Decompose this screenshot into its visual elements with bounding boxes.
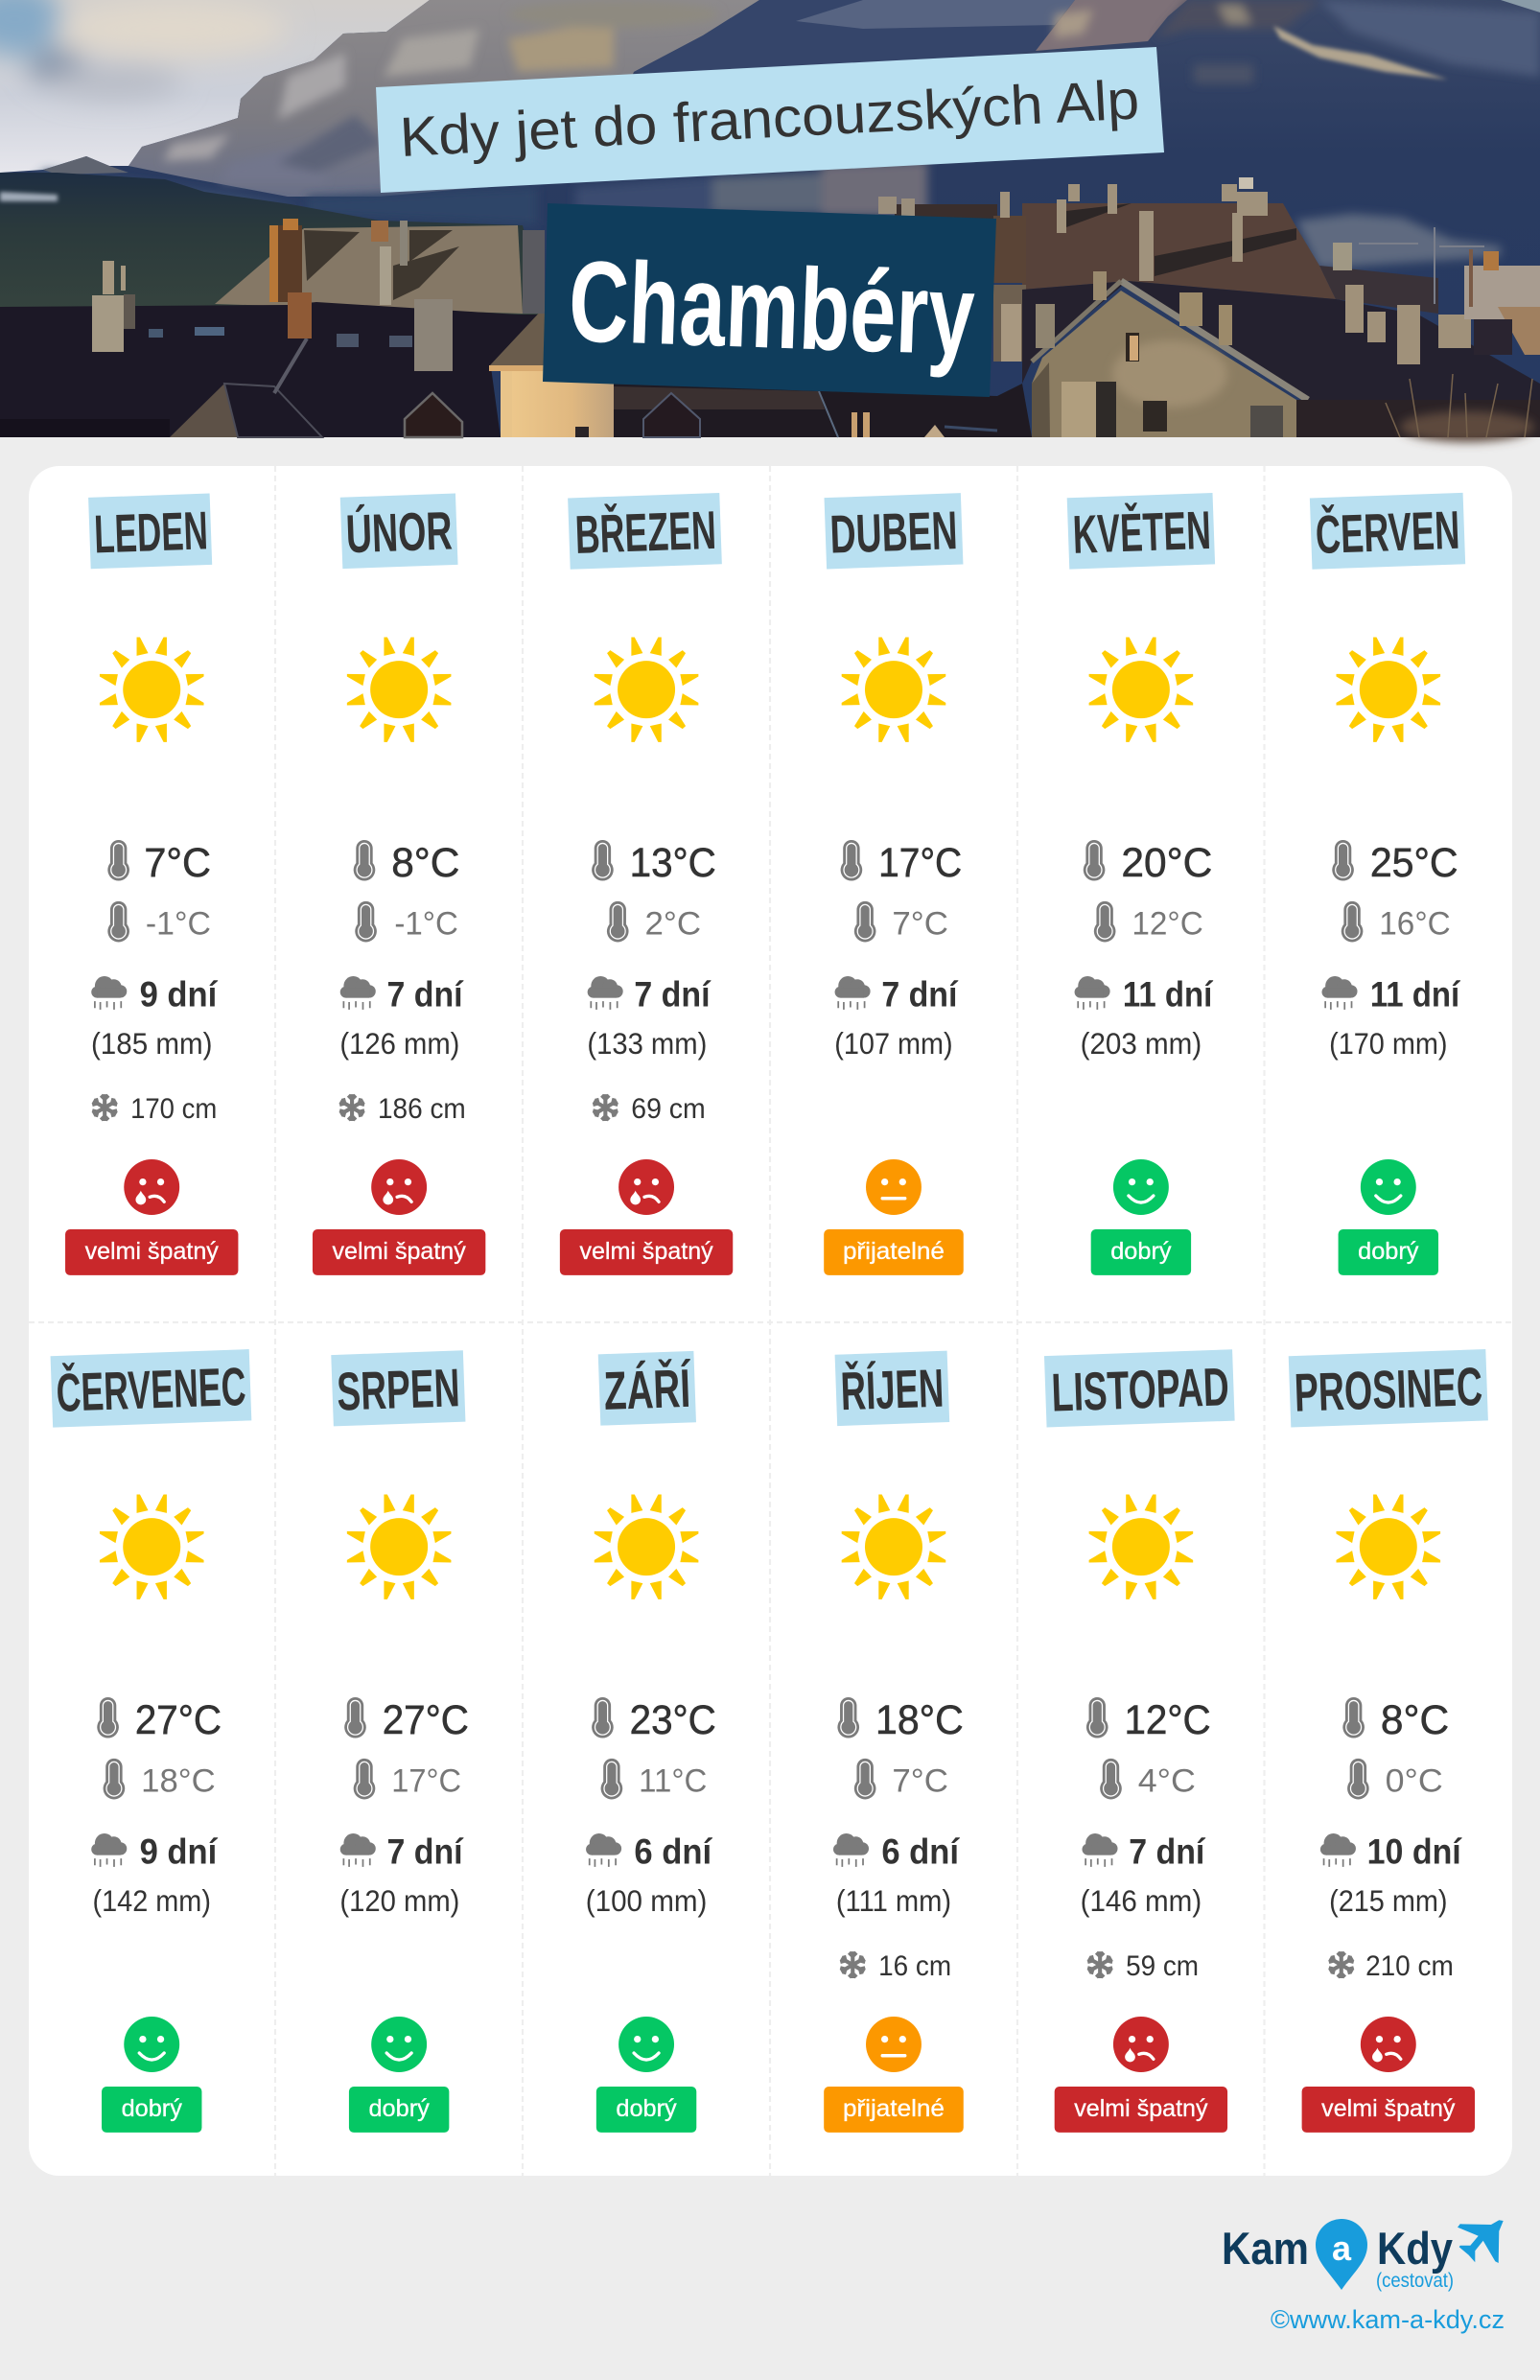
high temperature: 8°C bbox=[1381, 1697, 1449, 1743]
panel: ZÁŘÍ bbox=[586, 1351, 716, 2133]
icon: sun bbox=[595, 1494, 698, 1599]
rainy days bbox=[91, 1831, 219, 1871]
rating badge: velmi špatný bbox=[1074, 2095, 1208, 2122]
rating badge: přijatelné bbox=[843, 1238, 945, 1265]
rating badge bbox=[349, 2087, 449, 2133]
rating icon bbox=[1361, 2017, 1416, 2072]
precipitation: (107 mm) bbox=[834, 1026, 953, 1061]
panel: ÚNOR bbox=[313, 494, 485, 1275]
snow depth: 186 cm bbox=[378, 1094, 466, 1125]
month heading bbox=[825, 493, 963, 569]
rating icon bbox=[1361, 1159, 1416, 1215]
panel: KVĚTEN bbox=[1067, 493, 1215, 1275]
low temperature: 0°C bbox=[1386, 1763, 1443, 1800]
panel: SRPEN bbox=[331, 1350, 469, 2133]
rating icon bbox=[1113, 1159, 1169, 1215]
rainy days: 6 dní bbox=[634, 1831, 713, 1871]
low temperature bbox=[104, 1759, 216, 1800]
rating badge: dobrý bbox=[1110, 1238, 1172, 1265]
rating icon bbox=[124, 2017, 179, 2072]
high temperature: 23°C bbox=[630, 1697, 716, 1743]
panel: BŘEZEN bbox=[560, 493, 733, 1275]
rating icon bbox=[618, 1159, 674, 1215]
rating icon bbox=[866, 1159, 922, 1215]
panel: ČERVENEC bbox=[51, 1349, 251, 2133]
rainy days: 11 dní bbox=[1123, 973, 1214, 1014]
rainy days: 7 dní bbox=[1129, 1831, 1206, 1871]
precipitation: (146 mm) bbox=[1081, 1883, 1202, 1918]
high temperature bbox=[592, 840, 716, 886]
rainy days bbox=[1082, 1831, 1206, 1871]
logo word: Kam: Kam bbox=[1222, 2223, 1309, 2274]
rating icon bbox=[371, 1159, 427, 1215]
panel: PROSINEC bbox=[1289, 1349, 1488, 2133]
icon: sun bbox=[842, 637, 945, 742]
rating icon bbox=[371, 2017, 427, 2072]
month heading: BŘEZEN bbox=[574, 500, 717, 565]
snow depth: 16 cm bbox=[878, 1951, 951, 1982]
icon: sun bbox=[1337, 637, 1440, 742]
rating badge bbox=[596, 2087, 696, 2133]
snow depth bbox=[338, 1094, 466, 1125]
city banner: Chambéry bbox=[543, 203, 996, 397]
low temperature bbox=[107, 901, 211, 943]
month heading bbox=[340, 494, 458, 569]
icon: sun bbox=[100, 637, 204, 742]
rating icon bbox=[618, 2017, 674, 2072]
snow depth: 69 cm bbox=[631, 1094, 706, 1125]
month heading bbox=[568, 493, 722, 570]
precipitation: (120 mm) bbox=[339, 1883, 459, 1918]
month heading bbox=[598, 1351, 696, 1426]
panel: months card bbox=[29, 466, 1512, 2176]
high temperature bbox=[592, 1697, 716, 1743]
rating badge bbox=[102, 2087, 201, 2133]
precipitation: (111 mm) bbox=[836, 1883, 951, 1918]
icon: map pin with a bbox=[1316, 2219, 1367, 2290]
rating badge bbox=[824, 1229, 964, 1275]
high temperature: 17°C bbox=[878, 840, 962, 886]
panel: DUBEN bbox=[824, 493, 964, 1275]
month heading bbox=[331, 1350, 465, 1426]
high temperature bbox=[1342, 1697, 1449, 1743]
month heading bbox=[51, 1349, 251, 1428]
high temperature: 7°C bbox=[144, 840, 211, 886]
snow depth bbox=[1328, 1951, 1454, 1982]
icon: sun bbox=[100, 1494, 204, 1599]
low temperature: 16°C bbox=[1379, 906, 1451, 943]
precipitation: (170 mm) bbox=[1329, 1026, 1448, 1061]
icon: sun bbox=[347, 1494, 451, 1599]
rating badge: dobrý bbox=[122, 2095, 182, 2122]
month heading bbox=[835, 1351, 949, 1426]
low temperature: 7°C bbox=[892, 906, 948, 943]
rainy days: 10 dní bbox=[1367, 1831, 1462, 1871]
month heading bbox=[88, 493, 212, 569]
low temperature: 7°C bbox=[892, 1763, 948, 1800]
rainy days: 7 dní bbox=[386, 1831, 464, 1871]
rainy days bbox=[1320, 1831, 1462, 1871]
rating badge: dobrý bbox=[616, 2095, 677, 2122]
rainy days bbox=[340, 973, 464, 1014]
low temperature bbox=[854, 1759, 948, 1800]
snow depth bbox=[839, 1951, 951, 1982]
rainy days bbox=[1321, 973, 1461, 1014]
precipitation: (100 mm) bbox=[586, 1883, 707, 1918]
snow depth bbox=[91, 1094, 217, 1125]
low temperature: 2°C bbox=[644, 906, 701, 943]
icon: sun bbox=[842, 1494, 945, 1599]
high temperature bbox=[1086, 1697, 1211, 1743]
panel: ŘÍJEN bbox=[824, 1351, 964, 2133]
snow depth: 170 cm bbox=[130, 1094, 217, 1125]
icon: sun bbox=[1089, 1494, 1193, 1599]
rainy days bbox=[1075, 973, 1214, 1014]
precipitation: (133 mm) bbox=[587, 1026, 707, 1061]
high temperature: 27°C bbox=[135, 1697, 222, 1743]
header photo: Alps above Chambéry roofs bbox=[0, 0, 1540, 442]
low temperature: 17°C bbox=[391, 1763, 461, 1800]
low temperature: -1°C bbox=[394, 906, 458, 943]
icon: sun bbox=[347, 637, 451, 742]
precipitation: (142 mm) bbox=[93, 1883, 211, 1918]
logo subtitle: (cestovat) bbox=[1376, 2270, 1454, 2292]
logo: Kam a Kdy bbox=[1222, 2219, 1504, 2292]
high temperature: 13°C bbox=[630, 840, 716, 886]
high temperature bbox=[97, 1697, 222, 1743]
low temperature bbox=[854, 901, 948, 943]
rainy days bbox=[588, 973, 712, 1014]
rainy days: 7 dní bbox=[634, 973, 712, 1014]
low temperature bbox=[601, 1759, 707, 1800]
icon: airplane bbox=[1458, 2220, 1504, 2263]
snow depth bbox=[1086, 1951, 1199, 1982]
rainy days bbox=[833, 1831, 961, 1871]
month heading: SRPEN bbox=[336, 1357, 461, 1422]
rating badge: přijatelné bbox=[843, 2095, 945, 2122]
high temperature bbox=[354, 840, 459, 886]
icon: map pin with a: a bbox=[1332, 2228, 1352, 2268]
rating icon bbox=[1113, 2017, 1169, 2072]
month heading: LISTOPAD bbox=[1051, 1356, 1230, 1423]
rating badge: dobrý bbox=[368, 2095, 430, 2122]
rainy days: 6 dní bbox=[881, 1831, 961, 1871]
low temperature bbox=[1094, 901, 1203, 943]
high temperature bbox=[841, 840, 962, 886]
icon: sun bbox=[1337, 1494, 1440, 1599]
low temperature: 4°C bbox=[1138, 1763, 1196, 1800]
city banner: Chambéry: Chambéry bbox=[567, 237, 977, 380]
high temperature bbox=[1332, 840, 1458, 886]
precipitation: (126 mm) bbox=[339, 1026, 459, 1061]
logo word: Kdy: Kdy bbox=[1377, 2223, 1453, 2274]
high temperature: 12°C bbox=[1124, 1697, 1211, 1743]
snow depth: 210 cm bbox=[1365, 1951, 1454, 1982]
low temperature bbox=[607, 901, 701, 943]
low temperature: 11°C bbox=[639, 1763, 707, 1800]
rating badge: velmi špatný bbox=[333, 1238, 466, 1265]
low temperature bbox=[354, 1759, 461, 1800]
month heading: ŘÍJEN bbox=[840, 1358, 945, 1421]
rainy days bbox=[586, 1831, 713, 1871]
low temperature bbox=[1342, 901, 1451, 943]
website credit: ©www.kam-a-kdy.cz bbox=[1271, 2305, 1505, 2334]
high temperature: 20°C bbox=[1121, 840, 1212, 886]
rating badge: velmi špatný bbox=[579, 1238, 713, 1265]
high temperature bbox=[344, 1697, 469, 1743]
rating badge bbox=[65, 1229, 238, 1275]
high temperature bbox=[107, 840, 211, 886]
rating icon bbox=[124, 1159, 179, 1215]
precipitation: (215 mm) bbox=[1329, 1883, 1448, 1918]
icon: sun bbox=[595, 637, 698, 742]
icon: sun bbox=[1089, 637, 1193, 742]
rating badge bbox=[560, 1229, 733, 1275]
rating icon bbox=[866, 2017, 922, 2072]
rating badge bbox=[313, 1229, 485, 1275]
panel: ČERVEN bbox=[1310, 493, 1465, 1275]
rainy days: 11 dní bbox=[1370, 973, 1461, 1014]
month heading: ÚNOR bbox=[345, 500, 454, 564]
rating badge bbox=[1055, 2087, 1227, 2133]
month heading: ČERVENEC bbox=[56, 1356, 246, 1423]
snow depth bbox=[592, 1094, 706, 1125]
low temperature bbox=[1100, 1759, 1196, 1800]
rainy days bbox=[340, 1831, 464, 1871]
month heading bbox=[1067, 493, 1215, 570]
low temperature: -1°C bbox=[146, 906, 211, 943]
rainy days: 9 dní bbox=[140, 973, 219, 1014]
high temperature: 8°C bbox=[391, 840, 459, 886]
rating badge: velmi špatný bbox=[85, 1238, 219, 1265]
panel: LEDEN bbox=[65, 493, 238, 1275]
low temperature: 12°C bbox=[1132, 906, 1203, 943]
low temperature: 18°C bbox=[141, 1763, 216, 1800]
precipitation: (185 mm) bbox=[91, 1026, 213, 1061]
rainy days bbox=[91, 973, 219, 1014]
rainy days: 7 dní bbox=[386, 973, 464, 1014]
rating badge: velmi špatný bbox=[1321, 2095, 1456, 2122]
rainy days: 7 dní bbox=[881, 973, 959, 1014]
panel: LISTOPAD bbox=[1044, 1349, 1235, 2133]
high temperature: 27°C bbox=[383, 1697, 469, 1743]
rainy days bbox=[835, 973, 959, 1014]
month heading bbox=[1310, 493, 1465, 570]
high temperature bbox=[837, 1697, 964, 1743]
month heading: LEDEN bbox=[93, 500, 209, 564]
rating badge bbox=[1339, 1229, 1438, 1275]
rating badge bbox=[824, 2087, 964, 2133]
precipitation: (203 mm) bbox=[1081, 1026, 1202, 1061]
high temperature: 25°C bbox=[1370, 840, 1458, 886]
low temperature bbox=[1347, 1759, 1443, 1800]
snow depth: 59 cm bbox=[1126, 1951, 1199, 1982]
rating badge bbox=[1091, 1229, 1191, 1275]
rating badge: dobrý bbox=[1358, 1238, 1419, 1265]
month heading: ZÁŘÍ bbox=[603, 1358, 692, 1421]
low temperature bbox=[355, 901, 458, 943]
month heading: KVĚTEN bbox=[1072, 500, 1212, 565]
title banner: Kdy jet do francouzských Alp bbox=[376, 47, 1164, 193]
title banner: Kdy jet do francouzských Alp: Kdy jet do francouzských Alp bbox=[398, 68, 1141, 169]
month heading: ČERVEN bbox=[1315, 500, 1460, 565]
rating badge bbox=[1302, 2087, 1475, 2133]
high temperature: 18°C bbox=[875, 1697, 964, 1743]
month heading: DUBEN bbox=[828, 500, 959, 565]
rainy days: 9 dní bbox=[140, 1831, 219, 1871]
month heading bbox=[1044, 1349, 1235, 1427]
